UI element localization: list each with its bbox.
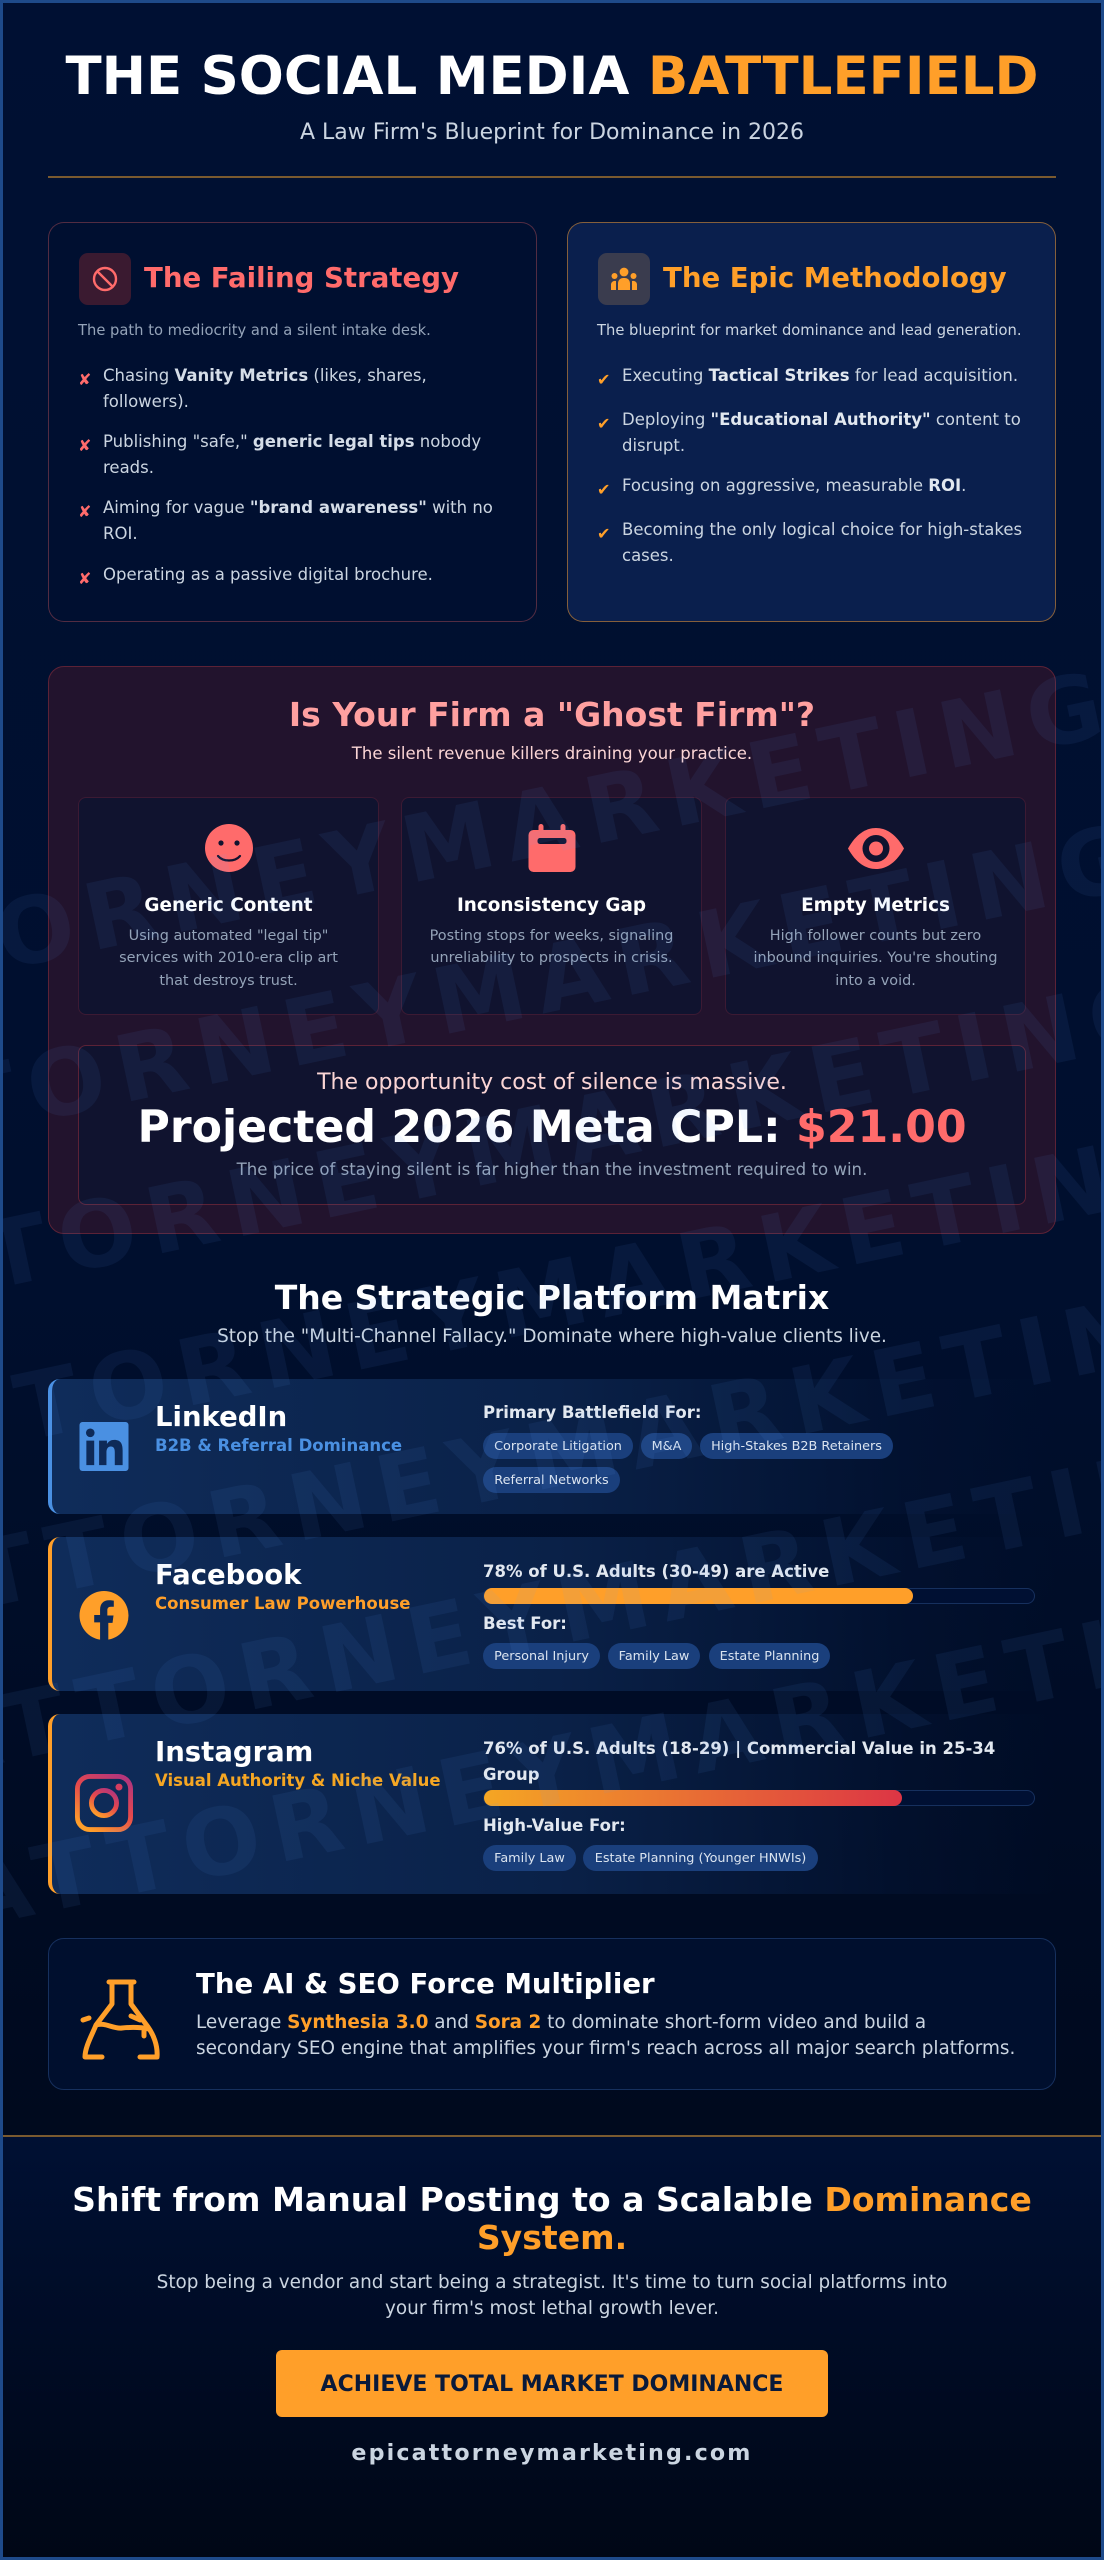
footer text: your firm's most lethal growth lever. (385, 2298, 719, 2319)
card: inconsistency gap: unreliability to prospects in crisis. (430, 950, 673, 966)
call to action button (276, 2350, 828, 2417)
heading: platform matrix: The Strategic Platform Matrix (275, 1278, 829, 1317)
callout: projected CPL (78, 1045, 1026, 1205)
footer text: Stop being a vendor and start being a strategist. It's time to turn social platforms into (157, 2272, 947, 2293)
platform matrix subtitle: Stop the "Multi-Channel Fallacy." Dominate where high-value clients live. (217, 1326, 887, 1347)
panel: ghost firm (48, 666, 1056, 1234)
label: high-value: High-Value For: (483, 1816, 626, 1835)
footer heading (72, 2180, 1032, 2257)
heading: failing strategy: The Failing Strategy (144, 261, 459, 294)
progress bar: 78% (483, 1588, 1035, 1604)
label: best for: Best For: (483, 1614, 567, 1633)
card: empty metrics (725, 797, 1026, 1015)
list: epic items: ✔ (597, 524, 610, 543)
card: generic content: Using automated "legal tip" (129, 928, 328, 944)
header divider (48, 176, 1056, 178)
call to action button: ACHIEVE TOTAL MARKET DOMINANCE (321, 2372, 783, 2397)
list: epic items: ✔ (597, 414, 610, 433)
stat label: Group (483, 1765, 540, 1784)
panel: failing strategy (48, 222, 537, 622)
list: failing items: ✘ (78, 569, 91, 588)
list: failing items: ✘ (78, 436, 91, 455)
body text (196, 2012, 1015, 2059)
heading: epic methodology: The Epic Methodology (663, 261, 1007, 294)
list: failing items: Publishing "safe," generic legal tips nobody (103, 432, 481, 451)
card: linkedin (48, 1379, 1056, 1514)
list: failing items: ROI. (103, 524, 138, 543)
description: The blueprint for market dominance and lead generation. (597, 322, 1022, 339)
icon: linkedin (80, 1422, 128, 1471)
tags: linkedin (483, 1433, 893, 1493)
list: failing items: ✘ (78, 502, 91, 521)
description: The path to mediocrity and a silent intake desk. (78, 322, 431, 339)
ghost subtitle: The silent revenue killers draining your practice. (352, 744, 752, 763)
list: epic items: Deploying "Educational Authority" content to (622, 410, 1021, 429)
heading: force multiplier: The AI & SEO Force Multiplier (196, 1967, 655, 2000)
heading: ghost firm: Is Your Firm a "Ghost Firm"? (289, 695, 815, 734)
card: generic content: Generic Content (144, 895, 313, 916)
list: epic items: Becoming the only logical choice for high-stakes (622, 520, 1022, 539)
list: epic items: ✔ (597, 480, 610, 499)
platform name: Instagram (155, 1736, 313, 1768)
card: generic content: that destroys trust. (159, 973, 298, 989)
panel: AI and SEO force multiplier (48, 1938, 1056, 2090)
list: epic items: Focusing on aggressive, measurable ROI. (622, 476, 966, 495)
card: empty metrics: inbound inquiries. You're shouting (753, 950, 998, 966)
icon: ban (79, 253, 131, 305)
icon: facebook (80, 1591, 128, 1640)
platform tagline: Visual Authority & Niche Value (155, 1771, 441, 1790)
list: failing items: Chasing Vanity Metrics (likes, shares, (103, 366, 427, 385)
stat label: 76% of U.S. Adults (18-29) | Commercial Value in 25-34 (483, 1739, 995, 1758)
list: failing items: ✘ (78, 370, 91, 389)
stat label: 78% of U.S. Adults (30-49) are Active (483, 1562, 829, 1581)
tags: linkedin: M&A (652, 1439, 681, 1454)
platform name: LinkedIn (155, 1401, 287, 1433)
list: failing items: Aiming for vague "brand awareness" with no (103, 498, 493, 517)
footer band (3, 2135, 1101, 2557)
platform tagline: Consumer Law Powerhouse (155, 1594, 411, 1613)
icon: eye (848, 828, 904, 869)
tags: facebook: Personal Injury (494, 1649, 589, 1664)
progress bar: 76% (483, 1790, 1035, 1806)
subtitle: A Law Firm's Blueprint for Dominance in 2026 (300, 120, 804, 145)
title: THE SOCIAL MEDIA BATTLEFIELD (65, 46, 1039, 107)
list: epic items (597, 366, 1022, 565)
list: failing items: reads. (103, 458, 154, 477)
tags: linkedin: High-Stakes B2B Retainers (711, 1439, 882, 1454)
card: inconsistency gap: Posting stops for weeks, signaling (430, 928, 673, 944)
list: failing items: followers). (103, 392, 189, 411)
card: facebook (48, 1537, 1056, 1691)
card: generic content: services with 2010-era clip art (119, 950, 338, 966)
body text: Leverage Synthesia 3.0 and Sora 2 to dominate short-form video and build a (196, 2012, 926, 2033)
tags: facebook (483, 1643, 830, 1669)
website url: epicattorneymarketing.com (351, 2440, 753, 2466)
list: failing items: Operating as a passive digital brochure. (103, 565, 433, 584)
icon: flask (80, 1980, 160, 2060)
list: epic items: cases. (622, 546, 674, 565)
platform name: Facebook (155, 1559, 301, 1591)
panel: epic methodology (567, 222, 1056, 622)
card: empty metrics: Empty Metrics (801, 895, 950, 916)
tags: instagram: Family Law (494, 1851, 565, 1866)
tags: facebook: Family Law (619, 1649, 689, 1664)
footer heading: System. (477, 2218, 627, 2257)
list: failing items (78, 366, 493, 588)
card: instagram (48, 1714, 1056, 1894)
list: epic items: disrupt. (622, 436, 685, 455)
list: epic items: Executing Tactical Strikes for lead acquisition. (622, 366, 1018, 385)
footer heading: Shift from Manual Posting to a Scalable Dominance (72, 2180, 1032, 2219)
card: inconsistency gap (401, 797, 702, 1015)
callout figure: Projected 2026 Meta CPL: $21.00 (137, 1102, 967, 1153)
label: primary battlefield: Primary Battlefield For: (483, 1403, 702, 1422)
card: empty metrics: High follower counts but zero (770, 928, 981, 944)
tags: linkedin: Referral Networks (494, 1473, 609, 1488)
icon: smiling face (205, 824, 253, 872)
card: generic content (78, 797, 379, 1015)
card: inconsistency gap: Inconsistency Gap (457, 895, 646, 916)
tags: instagram (483, 1845, 818, 1871)
stat label (483, 1739, 995, 1784)
callout note: The price of staying silent is far higher than the investment required to win. (237, 1160, 867, 1179)
tags: instagram: Estate Planning (Younger HNWIs) (595, 1851, 806, 1866)
list: epic items: ✔ (597, 370, 610, 389)
icon: instagram (75, 1774, 133, 1832)
footer text (157, 2272, 947, 2319)
callout lead: The opportunity cost of silence is massive. (317, 1070, 787, 1095)
card: empty metrics: into a void. (835, 973, 916, 989)
tags: linkedin: Corporate Litigation (494, 1439, 622, 1454)
platform tagline: B2B & Referral Dominance (155, 1436, 402, 1455)
icon: people (598, 253, 650, 305)
tags: facebook: Estate Planning (720, 1649, 819, 1664)
body text: secondary SEO engine that amplifies your firm's reach across all major search platforms. (196, 2038, 1015, 2059)
icon: calendar (528, 824, 576, 872)
